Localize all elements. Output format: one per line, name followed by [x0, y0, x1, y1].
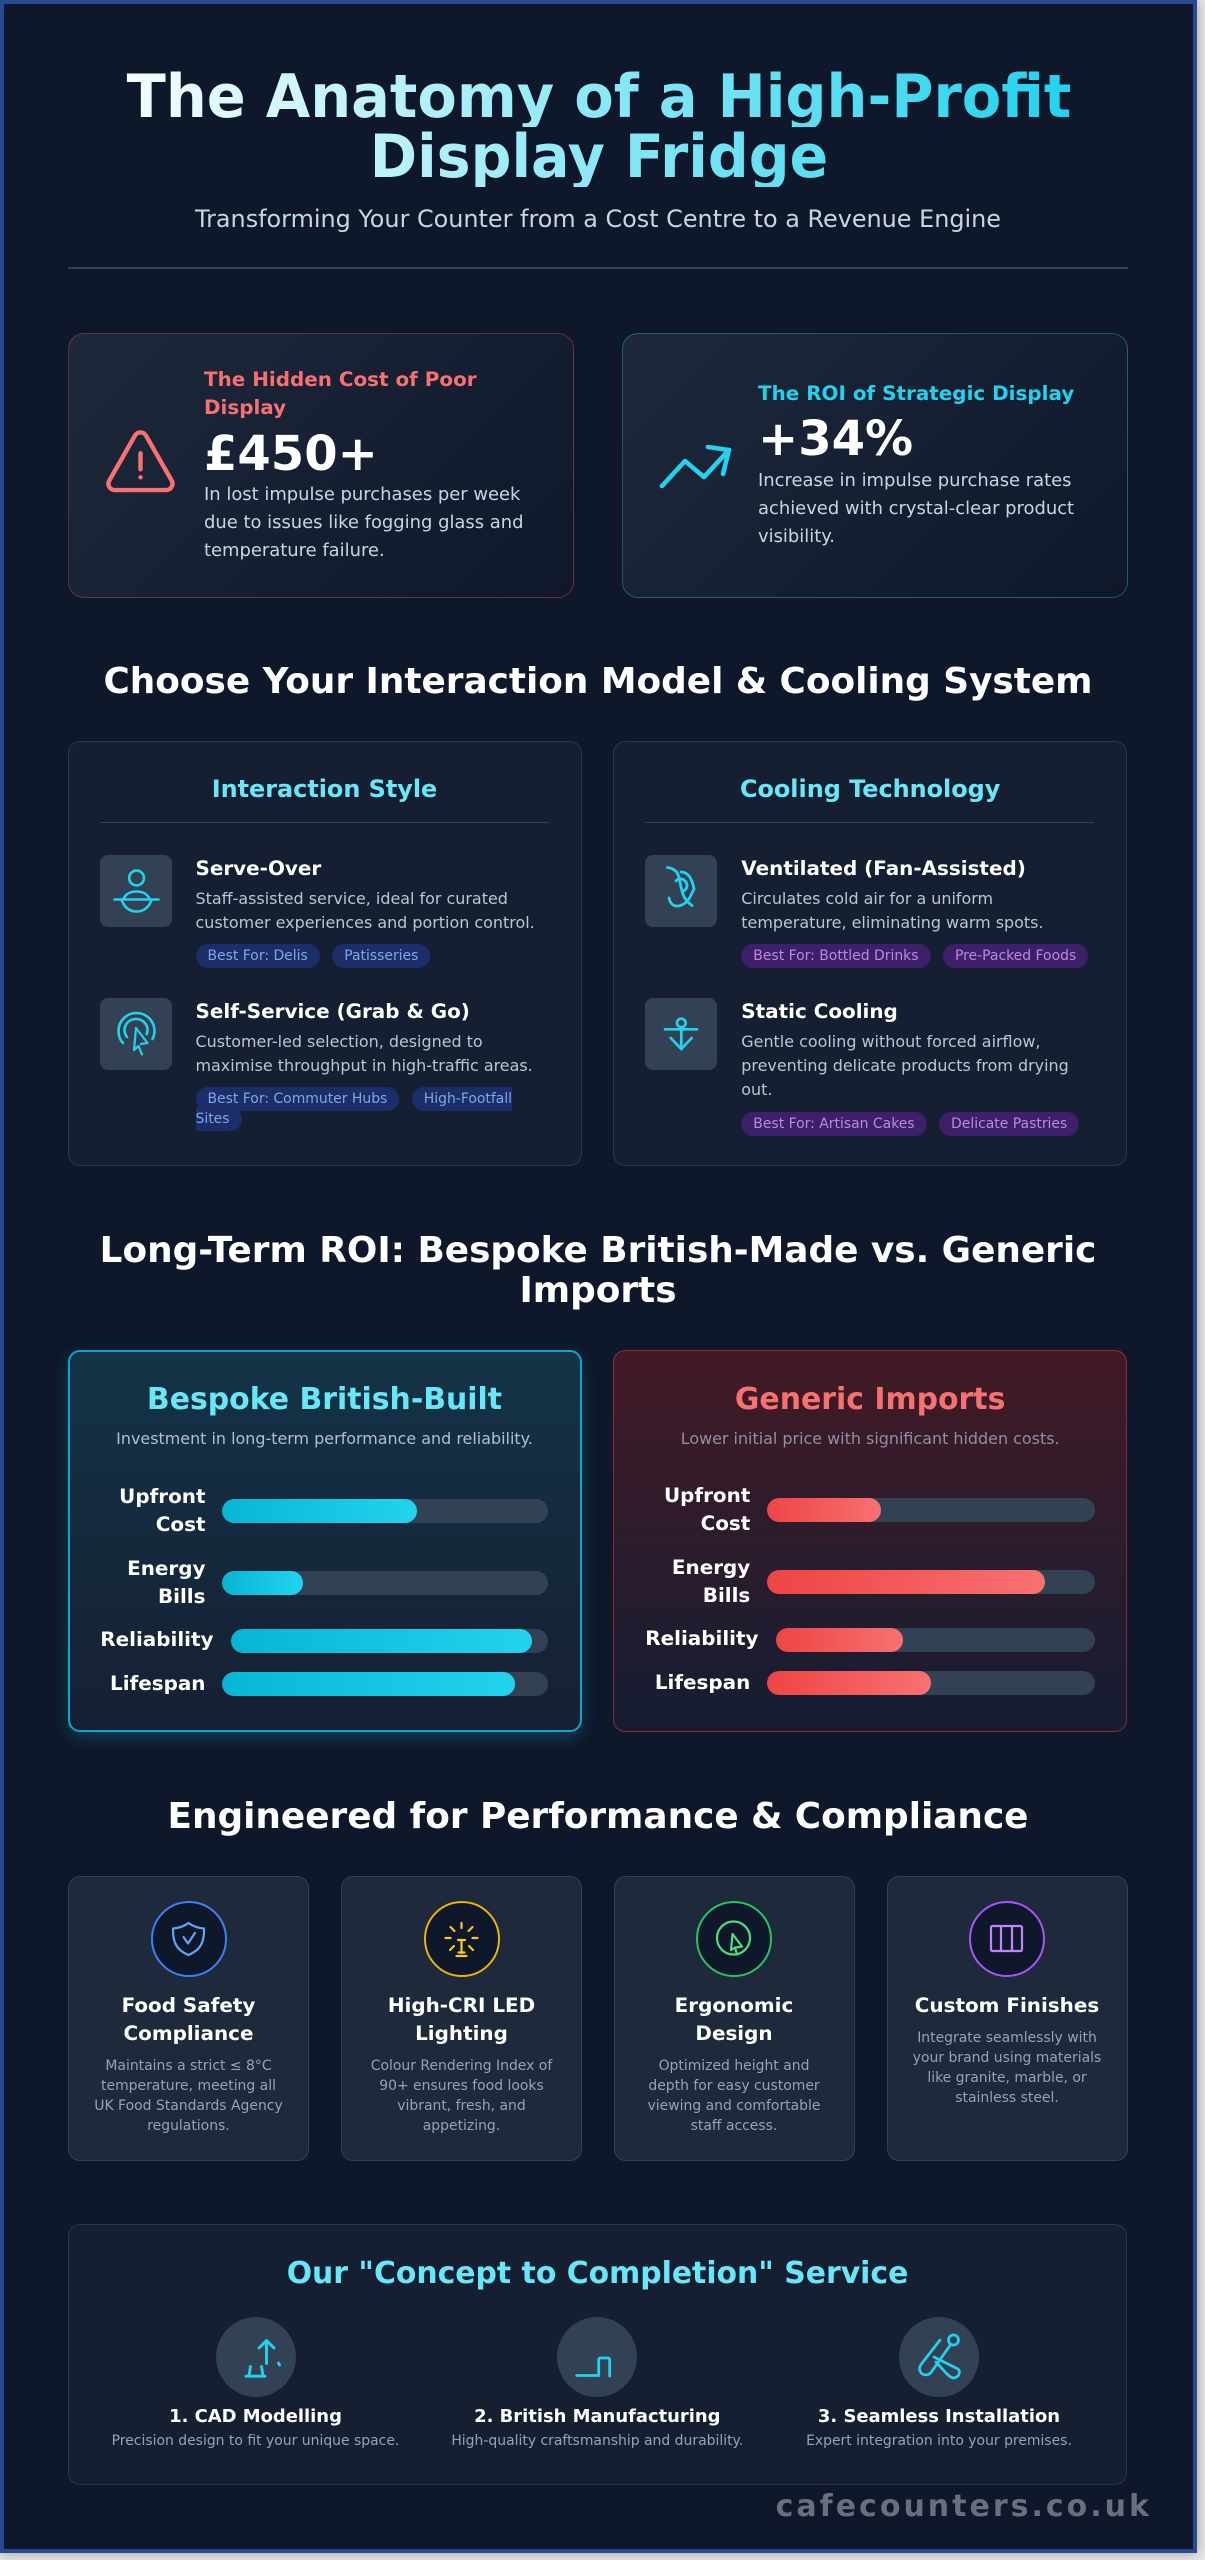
description: Increase in impulse purchase rates — [758, 470, 1072, 490]
tags: Best For: Artisan Cakes Delicate Pastries — [753, 1116, 1067, 1132]
description: maximise throughput in high-traffic areas. — [196, 1056, 533, 1074]
bar: reliability: Reliability — [100, 1628, 214, 1651]
heading: long-term ROI: Imports — [519, 1270, 677, 1310]
description: vibrant, fresh, and — [397, 2098, 526, 2114]
bar: lifespan — [655, 1671, 1095, 1695]
description — [886, 2028, 1128, 2108]
panel: cooling technology — [613, 741, 1127, 1166]
title: Ergonomic — [675, 1994, 793, 2016]
description: staff access. — [691, 2118, 777, 2134]
description: Customer-led selection, designed to — [196, 1032, 483, 1050]
description: out. — [741, 1080, 772, 1098]
icon: CAD — [216, 2316, 296, 2396]
bar: upfront cost: Cost — [156, 1513, 206, 1536]
title: Compliance — [124, 2022, 253, 2044]
description: stainless steel. — [955, 2090, 1059, 2106]
icon: manufacturing — [557, 2316, 637, 2396]
panel subtitle: Investment in long-term performance and reliability. — [116, 1428, 533, 1448]
description — [341, 2056, 582, 2136]
icon: warning triangle — [106, 430, 175, 492]
description: Optimized height and — [659, 2058, 809, 2074]
description: temperature, eliminating warm spots. — [741, 912, 1044, 932]
icon: self-service — [100, 998, 172, 1070]
description: UK Food Standards Agency — [94, 2098, 283, 2114]
bar: energy bills — [672, 1556, 1095, 1607]
bar: upfront cost — [664, 1484, 1095, 1535]
title: The Anatomy of a High-Profit — [126, 62, 1071, 132]
step: installation — [768, 2316, 1110, 2456]
icon: serve-over — [100, 855, 172, 927]
bar: lifespan — [110, 1672, 548, 1696]
card: LED lighting — [341, 1876, 582, 2161]
bar: energy bills: Energy — [672, 1556, 750, 1579]
step: manufacturing — [426, 2316, 768, 2456]
icon: fan — [645, 855, 717, 927]
description: preventing delicate products from drying — [741, 1056, 1069, 1074]
description — [741, 888, 1044, 932]
title: Ventilated (Fan-Assisted) — [741, 856, 1026, 880]
tags: Best For: Commuter Hubs High-Footfall — [208, 1091, 512, 1107]
heading: long-term ROI — [100, 1230, 1096, 1310]
panel heading: Our "Concept to Completion" Service — [287, 2256, 908, 2291]
title: Static Cooling — [741, 1000, 898, 1022]
heading: hidden cost: The Hidden Cost of Poor — [204, 368, 477, 390]
title: Food Safety — [122, 1994, 255, 2016]
bar: reliability — [100, 1628, 548, 1653]
icon: trending arrow — [660, 444, 732, 488]
description: Maintains a strict ≤ 8°C — [105, 2058, 272, 2074]
bar: energy bills: Energy — [127, 1557, 206, 1580]
panel heading: Interaction Style — [212, 775, 437, 803]
stat: £450+: £450+ — [204, 426, 378, 482]
heading: long-term ROI: Long-Term ROI: Bespoke British-Made vs. Generic — [100, 1230, 1096, 1270]
panel: hidden cost — [68, 333, 574, 598]
tags: Best For: Delis Patisseries — [208, 948, 418, 964]
title: Serve-Over — [196, 856, 321, 880]
step description: High-quality craftsmanship and durability. — [451, 2433, 743, 2449]
description — [758, 470, 1074, 546]
description: due to issues like fogging glass and — [204, 512, 524, 532]
description — [94, 2058, 283, 2134]
description: your brand using materials — [913, 2050, 1101, 2066]
description — [614, 2056, 854, 2136]
title: Design — [695, 2022, 773, 2044]
description — [196, 888, 535, 932]
title: Self-Service (Grab & Go) — [196, 1000, 470, 1022]
description: temperature, meeting all — [101, 2078, 276, 2094]
heading: ROI: The ROI of Strategic Display — [758, 382, 1074, 405]
step title: 1. CAD Modelling — [169, 2406, 342, 2427]
title — [614, 1992, 854, 2048]
bar: lifespan: Lifespan — [110, 1672, 206, 1695]
description — [204, 484, 524, 560]
bar: energy bills — [127, 1557, 548, 1608]
bar: reliability — [645, 1627, 1095, 1652]
heading: hidden cost — [204, 368, 477, 418]
icon: shield — [151, 1901, 227, 1977]
description — [741, 1032, 1069, 1098]
panel: bespoke — [62, 1350, 588, 1744]
description: viewing and comfortable — [648, 2098, 820, 2114]
panel heading: Bespoke British-Built — [147, 1382, 502, 1417]
subtitle: Transforming Your Counter from a Cost Centre to a Revenue Engine — [195, 205, 1001, 233]
description: achieved with crystal-clear product — [758, 498, 1074, 518]
step description: Expert integration into your premises. — [806, 2433, 1072, 2449]
heading: interaction model: Choose Your Interaction Model & Cooling System — [103, 661, 1093, 702]
heading: hidden cost: Display — [204, 396, 286, 418]
panel: interaction style — [68, 741, 582, 1166]
description: visibility. — [758, 526, 835, 546]
card: custom finishes — [886, 1876, 1128, 2161]
icon: anchor — [645, 998, 717, 1070]
panel subtitle: Lower initial price with significant hidden costs. — [681, 1428, 1060, 1448]
description: temperature failure. — [204, 540, 385, 560]
bar: upfront cost: Cost — [701, 1512, 750, 1535]
description: like granite, marble, or — [927, 2070, 1087, 2086]
description: customer experiences and portion control. — [196, 912, 535, 932]
bar: reliability: Reliability — [645, 1627, 759, 1650]
description — [196, 1032, 533, 1074]
title — [126, 62, 1071, 192]
icon: columns — [969, 1901, 1045, 1977]
description: Circulates cold air for a uniform — [741, 888, 993, 908]
bar: upfront cost: Upfront — [119, 1485, 206, 1508]
panel heading: Generic Imports — [735, 1382, 1005, 1417]
panel heading: Cooling Technology — [740, 775, 1000, 803]
bar: upfront cost: Upfront — [664, 1484, 750, 1507]
step title: 3. Seamless Installation — [818, 2406, 1060, 2427]
description: depth for easy customer — [648, 2078, 820, 2094]
description: regulations. — [147, 2118, 230, 2134]
icon: LED — [424, 1901, 500, 1977]
tags — [196, 1087, 512, 1131]
title: High-CRI LED — [388, 1994, 535, 2016]
description: In lost impulse purchases per week — [204, 484, 520, 504]
bar: upfront cost — [119, 1485, 548, 1536]
title: Lighting — [415, 2022, 508, 2044]
description: Staff-assisted service, ideal for curated — [196, 888, 508, 908]
item: serve-over — [100, 855, 535, 968]
description: 90+ ensures food looks — [379, 2078, 544, 2094]
title: Display Fridge — [369, 122, 828, 192]
heading: engineered: Engineered for Performance & Compliance — [168, 1796, 1028, 1837]
watermark: cafecounters.co.uk — [776, 2489, 1152, 2524]
tags: Sites — [196, 1111, 230, 1127]
bar: lifespan: Lifespan — [655, 1671, 750, 1694]
description: Gentle cooling without forced airflow, — [741, 1032, 1040, 1050]
step description: Precision design to fit your unique space. — [112, 2433, 399, 2449]
description: Colour Rendering Index of — [371, 2058, 552, 2074]
item: ventilated — [645, 855, 1088, 968]
tags: Best For: Bottled Drinks Pre-Packed Foods — [753, 948, 1076, 964]
panel: concept to completion — [68, 2224, 1127, 2485]
bar: energy bills: Bills — [158, 1585, 206, 1608]
bar: energy bills: Bills — [703, 1584, 750, 1607]
description: appetizing. — [423, 2118, 500, 2134]
item: static cooling — [645, 998, 1079, 1136]
title — [388, 1994, 535, 2044]
stat: +34%: +34% — [758, 411, 913, 467]
title: Custom Finishes — [915, 1994, 1099, 2016]
title — [122, 1994, 255, 2044]
item: self-service — [100, 998, 533, 1131]
panel: generic imports — [613, 1350, 1127, 1732]
step: CAD modelling — [84, 2316, 426, 2456]
panel: ROI — [622, 333, 1128, 598]
icon: tools — [899, 2316, 979, 2396]
card: ergonomic — [614, 1876, 854, 2161]
step title: 2. British Manufacturing — [474, 2406, 720, 2427]
card: food safety — [68, 1876, 309, 2161]
icon: cursor — [696, 1901, 772, 1977]
description: Integrate seamlessly with — [917, 2030, 1097, 2046]
